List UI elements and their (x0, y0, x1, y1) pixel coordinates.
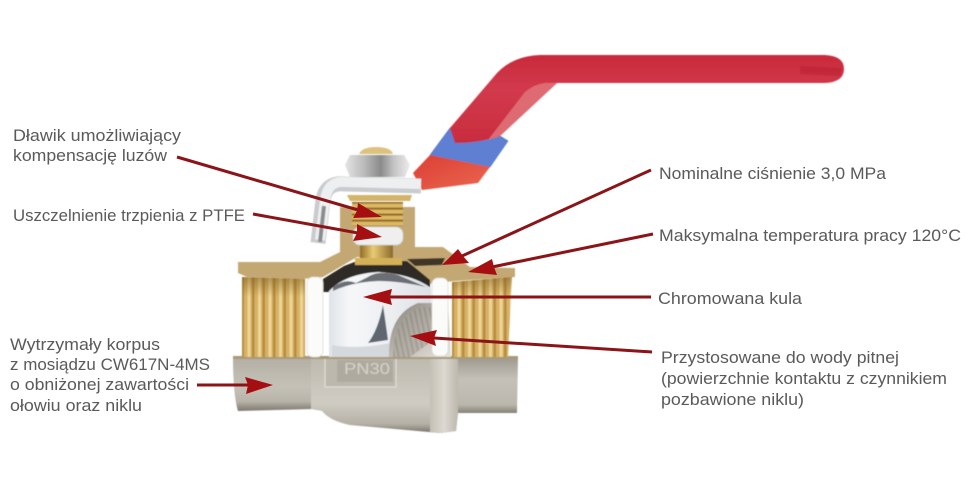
label: body material: ołowiu oraz niklu (10, 396, 142, 415)
stem shaft (360, 245, 393, 262)
packing thread teeth (407, 258, 445, 266)
gland collar (347, 195, 412, 201)
arrow: gland (177, 157, 382, 218)
handle: red lever (413, 55, 844, 190)
label: max temperature: Maksymalna temperatura pracy 120°C (659, 226, 961, 245)
body cavity (323, 261, 430, 292)
arrow: PTFE seal (253, 214, 382, 241)
ball bore (389, 303, 451, 357)
arrow: temperature (468, 234, 653, 275)
label: gland: kompensację luzów (13, 146, 168, 165)
chrome ball (329, 272, 451, 357)
label: drinking water: (powierzchnie kontaktu z czynnikiem (661, 369, 947, 388)
label: gland (13, 126, 182, 165)
stop plate (318, 184, 421, 243)
stem PTFE seal (353, 227, 403, 245)
lever grip (450, 55, 844, 143)
label: gland: Dławik umożliwiający (13, 126, 182, 145)
raised marking plate (325, 359, 396, 387)
left internal thread (242, 277, 305, 357)
ball reflection (368, 305, 388, 343)
label: drinking water (661, 348, 947, 409)
stem top (359, 147, 393, 154)
label: body material (10, 335, 210, 415)
label: nominal pressure: Nominalne ciśnienie 3,0 MPa (659, 164, 887, 183)
arrow: pressure (442, 170, 651, 265)
right internal thread (452, 277, 512, 357)
label: drinking water: pozbawione niklu) (661, 390, 804, 409)
body: lower nickel exterior (233, 356, 518, 433)
red end cap (413, 155, 490, 190)
PTFE seats (307, 277, 448, 357)
label: body material: z mosiądzu CW617N-4MS (10, 355, 210, 374)
label: body material: Wytrzymały korpus (10, 335, 160, 354)
stem assembly (318, 147, 421, 265)
gland nut (345, 155, 410, 177)
label: chrome ball: Chromowana kula (658, 289, 803, 308)
label: body material: o obniżonej zawartości (10, 375, 189, 394)
label: stem seal: Uszczelnienie trzpienia z PTFE (13, 206, 245, 225)
arrow: drinking water (410, 330, 652, 352)
valve photo group (233, 55, 844, 433)
label: drinking water: Przystosowane do wody pitnej (661, 348, 899, 367)
blue band (430, 128, 508, 167)
arrow: body (197, 377, 273, 394)
marking: PN30: PN30 (344, 361, 390, 378)
gland thread (352, 202, 403, 226)
arrow: chrome ball (363, 289, 651, 305)
body: brass section (238, 207, 515, 357)
